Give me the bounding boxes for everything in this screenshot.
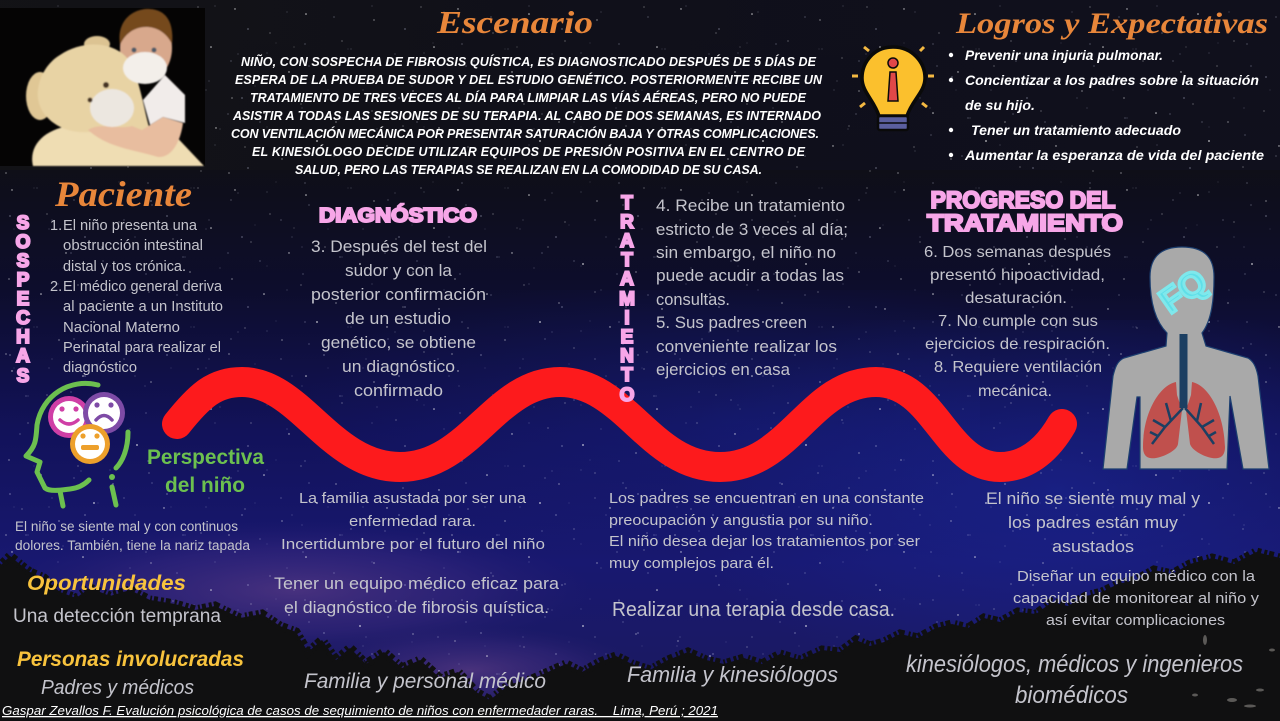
text block: treatment progress: ejercicios de respiración. [925, 336, 1110, 353]
text block: family perspective [281, 490, 545, 553]
heading: Diagnóstico: DIAGNÓSTICO [319, 203, 477, 227]
text block: scenario: SALUD, PERO LAS TERAPIAS SE REALIZAN EN LA COMODIDAD DE SU CASA. [295, 163, 762, 177]
text block: suspicions [50, 218, 223, 376]
text: people 3: Familia y kinesiólogos [627, 662, 838, 687]
vertical heading: Tratamiento: TRATAMIENTO [619, 193, 635, 406]
text block: treatment progress: 6. Dos semanas después [924, 244, 1111, 261]
text: opportunity 4: así evitar complicaciones [1046, 612, 1225, 629]
text block: treatment: estricto de 3 veces al día; [656, 221, 848, 239]
text block: diagnosis: confirmado [354, 382, 443, 400]
text: people 4 [906, 651, 1243, 709]
text block: treatment progress: desaturación. [965, 290, 1067, 307]
text block: suspicions: 2. [50, 279, 62, 295]
red wave timeline [177, 382, 1062, 467]
face: neutral [70, 424, 110, 464]
text block: suspicions: El niño presenta una [63, 218, 198, 234]
icon: light bulb [852, 47, 934, 130]
text block: scenario: TRATAMIENTO DE TRES VECES AL DÍA PARA LIMPIAR LAS VÍAS AÉREAS, PERO NO PUEDE [250, 90, 807, 105]
text block: scenario: EL KINESIÓLOGO DECIDE UTILIZAR EQUIPOS DE PRESIÓN POSITIVA EN EL CENTRO DE [252, 144, 806, 159]
text block: suspicions: Nacional Materno [63, 320, 180, 336]
text block: treatment: sin embargo, el niño no [656, 244, 836, 262]
text block: achievements list: Aumentar la esperanza de vida del paciente [964, 147, 1264, 163]
text block: child perspective [15, 519, 250, 553]
text block: progress perspective [986, 490, 1201, 556]
text: people 4: kinesiólogos, médicos y ingenieros [906, 651, 1243, 678]
photo: child with teddy bear [0, 8, 205, 166]
heading: child perspective: Perspectiva [147, 446, 264, 469]
text block: treatment progress: 8. Requiere ventilación [934, 359, 1102, 376]
text: opportunity 2 [274, 574, 560, 617]
text block: parents perspective: Los padres se encuentran en una constante [609, 491, 924, 507]
text block: achievements list: Tener un tratamiento adecuado [971, 122, 1181, 138]
text: opportunity 2: Tener un equipo médico eficaz para [274, 574, 560, 593]
text block: treatment [656, 197, 848, 379]
text block: treatment: 5. Sus padres creen [656, 314, 807, 332]
heading: child perspective: del niño [165, 474, 245, 497]
text block: progress perspective: asustados [1052, 538, 1134, 556]
heading: Personas involucradas: Personas involucradas [17, 648, 244, 671]
heading: Oportunidades: Oportunidades [27, 572, 186, 595]
text block: treatment progress [924, 244, 1111, 400]
text block: suspicions: obstrucción intestinal [63, 238, 203, 254]
vertical heading: Sospechas: SOSPECHAS [16, 213, 30, 387]
title: Escenario: Escenario [436, 4, 593, 40]
text block: suspicions: diagnóstico [63, 360, 137, 376]
text block: diagnosis [311, 238, 487, 400]
icon: head with emotion faces [26, 383, 128, 506]
text block: scenario [231, 54, 823, 177]
text block: achievements list [949, 47, 1264, 163]
text: people 4: biomédicos [1015, 682, 1128, 709]
heading: Progreso del tratamiento: TRATAMIENTO [927, 210, 1123, 237]
text block: scenario: NIÑO, CON SOSPECHA DE FIBROSIS QUÍSTICA, ES DIAGNOSTICADO DESPUÉS DE 5 DÍAS DE [241, 54, 817, 69]
heading: child perspective [147, 446, 264, 497]
text block: achievements list: de su hijo. [965, 97, 1035, 113]
text: people 1: Padres y médicos [41, 677, 194, 699]
text block: child perspective: dolores. También, tiene la nariz tapada [15, 538, 250, 553]
text block: suspicions: al paciente a un Instituto [63, 299, 223, 315]
text block: diagnosis: sudor y con la [345, 262, 453, 280]
text: opportunity 3: Realizar una terapia desde casa. [612, 599, 895, 621]
text block: progress perspective: los padres están muy [1008, 514, 1179, 532]
text block: parents perspective: El niño desea dejar los tratamientos por ser [609, 534, 920, 550]
text block: suspicions: 1. [50, 218, 62, 234]
text block: achievements list: Concientizar a los padres sobre la situación [965, 72, 1259, 88]
text block: suspicions: El médico general deriva [63, 279, 223, 295]
text block: diagnosis: posterior confirmación [311, 286, 486, 304]
text block: diagnosis: un diagnóstico [342, 358, 455, 376]
text block: parents perspective [609, 491, 924, 572]
footer citation: Gaspar Zevallos F. Evalución psicológica de casos de sequimiento de niños con enfermedader raras. Lima, Perú ; 2021 [2, 703, 718, 718]
title: Logros y Expectativas: Logros y Expectativas [955, 7, 1268, 40]
text block: diagnosis: genético, se obtiene [321, 334, 476, 352]
text: opportunity 4: Diseñar un equipo médico con la [1017, 568, 1256, 585]
text block: parents perspective: muy complejos para él. [609, 556, 774, 572]
face: happy [48, 396, 90, 438]
text block: treatment: ejercicios en casa [656, 361, 791, 379]
text block: scenario: ESPERA DE LA PRUEBA DE SUDOR Y DEL ESTUDIO GENÉTICO. POSTERIORMENTE RECIBE UN [235, 72, 823, 87]
text: people 2: Familia y personal médico [304, 670, 546, 693]
text block: treatment: puede acudir a todas las [656, 267, 844, 285]
text block: diagnosis: de un estudio [345, 310, 451, 328]
text block: progress perspective: El niño se siente muy mal y [986, 490, 1201, 508]
text: opportunity 2: el diagnóstico de fibrosis quística. [284, 598, 549, 617]
text block: suspicions: Perinatal para realizar el [63, 340, 221, 356]
text block: family perspective: enfermedad rara. [349, 513, 476, 530]
text block: treatment: consultas. [656, 291, 730, 309]
text: opportunity 4: capacidad de monitorear al niño y [1013, 590, 1260, 607]
text block: diagnosis: 3. Después del test del [311, 238, 487, 256]
text block: scenario: ASISTIR A TODAS LAS SESIONES DE SU TERAPIA. AL CABO DE DOS SEMANAS, ES INTERNADO [232, 109, 821, 123]
title: Paciente: Paciente [54, 174, 192, 214]
heading: Progreso del tratamiento: PROGRESO DEL [930, 187, 1116, 214]
text block: treatment progress: presentó hipoactividad, [930, 267, 1105, 284]
text block: family perspective: Incertidumbre por el futuro del niño [281, 536, 545, 553]
text block: treatment progress: mecánica. [978, 383, 1052, 400]
text block: scenario: CON VENTILACIÓN MECÁNICA POR PRESENTAR SATURACIÓN BAJA Y OTRAS COMPLICACIONES. [231, 126, 819, 141]
text block: treatment: 4. Recibe un tratamiento [656, 197, 845, 215]
icon: body with lungs [1103, 247, 1269, 469]
text block: treatment: conveniente realizar los [656, 338, 837, 356]
text block: parents perspective: preocupación y angustia por su niño. [609, 513, 873, 529]
text block: child perspective: El niño se siente mal y con continuos [15, 519, 238, 534]
text: opportunity 1: Una detección temprana [13, 606, 221, 627]
text block: achievements list: Prevenir una injuria pulmonar. [965, 47, 1163, 63]
label: FQ: FQ [1152, 261, 1214, 321]
text block: family perspective: La familia asustada por ser una [299, 490, 527, 507]
text block: suspicions: distal y tos crónica. [63, 259, 186, 275]
face: sad [83, 392, 125, 434]
heading: Progreso del tratamiento [927, 187, 1123, 237]
text: opportunity 4 [1013, 568, 1260, 629]
text block: treatment progress: 7. No cumple con sus [938, 313, 1098, 330]
